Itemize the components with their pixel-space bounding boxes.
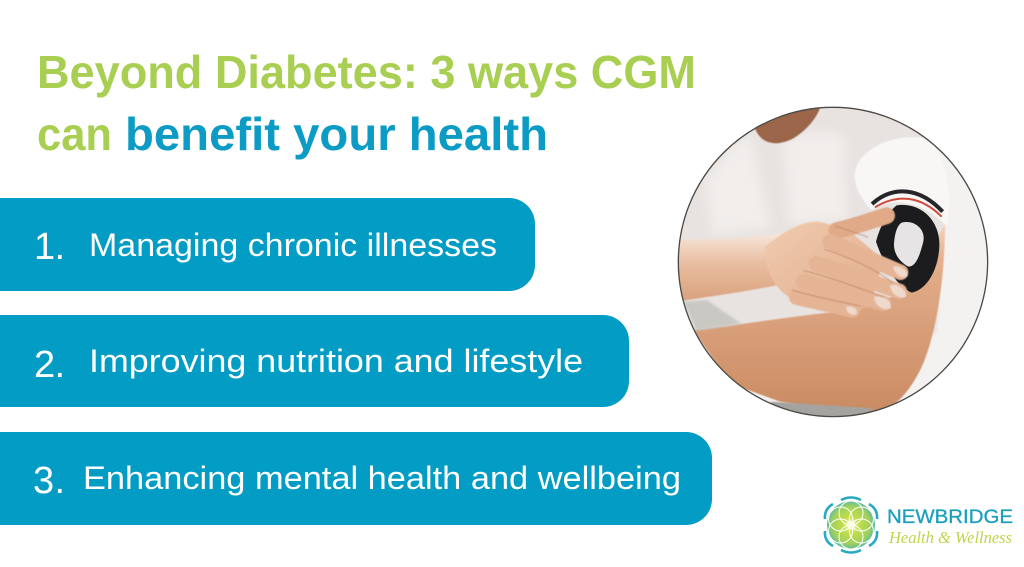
sleeve xyxy=(855,137,949,227)
panel: item 3 enhancing mental health and wellbeing: 3. xyxy=(33,460,65,502)
panel: item 2 improving nutrition and lifestyle xyxy=(0,315,629,407)
forearm xyxy=(677,233,787,302)
logo: Newbridge Health & Wellness: Health & Wellness xyxy=(888,528,1012,547)
grey surface xyxy=(683,300,742,331)
fingernails xyxy=(846,266,908,315)
sleeve stripes xyxy=(872,191,943,212)
photo: CGM sensor on upper arm xyxy=(678,106,988,418)
title xyxy=(37,46,696,160)
photo ring xyxy=(678,107,988,417)
black patch xyxy=(876,205,939,293)
neck xyxy=(754,108,820,144)
thumb xyxy=(837,216,887,231)
panel: item 1 managing chronic illnesses xyxy=(0,198,535,291)
logo: Newbridge Health & Wellness: NEWBRIDGE xyxy=(887,507,1013,528)
logo: Newbridge Health & Wellness xyxy=(824,498,1013,552)
panel: item 2 improving nutrition and lifestyle: Improving nutrition and lifestyle xyxy=(89,343,583,379)
shirt xyxy=(681,108,944,333)
sensor xyxy=(894,222,924,267)
upper arm xyxy=(693,223,945,417)
panel: item 1 managing chronic illnesses: 1. xyxy=(34,226,65,268)
finger creases xyxy=(792,226,893,306)
hand xyxy=(765,216,908,315)
fingers xyxy=(797,242,901,310)
panel: item 3 enhancing mental health and wellbeing xyxy=(0,432,712,525)
panel: item 1 managing chronic illnesses: Managing chronic illnesses xyxy=(89,227,497,263)
title: benefit your health xyxy=(125,108,548,160)
icon: mandala xyxy=(824,498,878,552)
panel: item 3 enhancing mental health and wellbeing: Enhancing mental health and wellbeing xyxy=(83,460,681,496)
title: can xyxy=(37,108,112,160)
panel: item 2 improving nutrition and lifestyle: 2. xyxy=(34,344,65,386)
title: Beyond Diabetes: 3 ways CGM xyxy=(37,46,696,98)
